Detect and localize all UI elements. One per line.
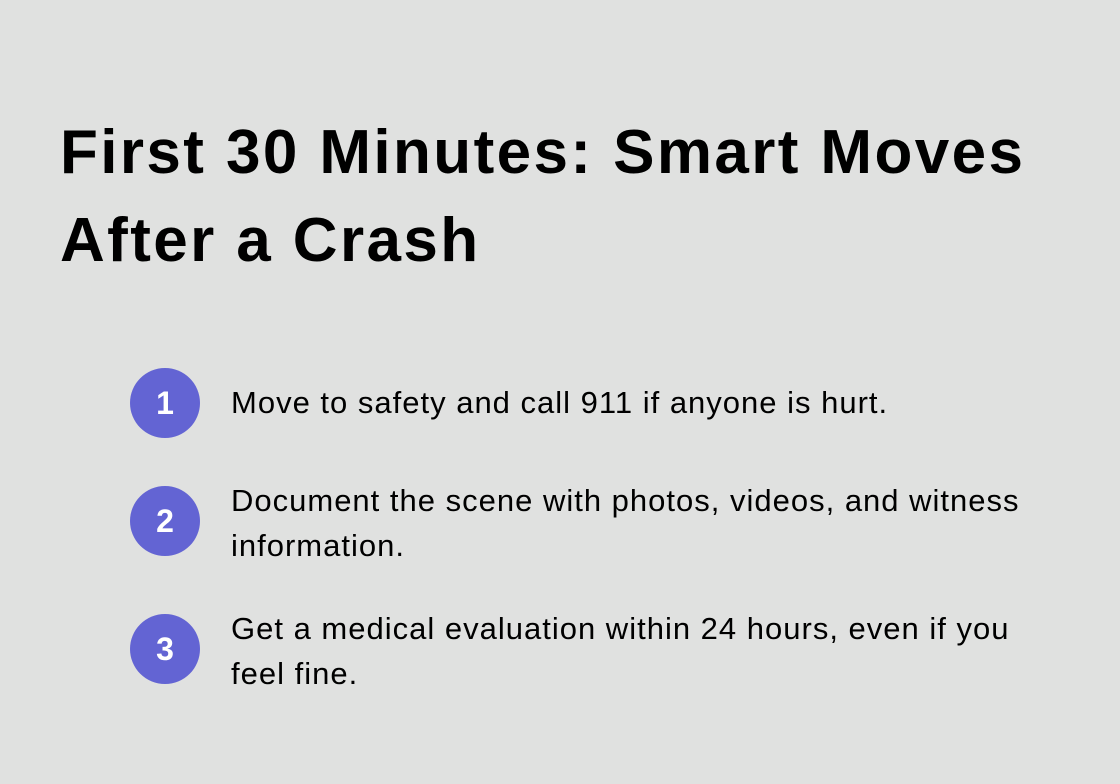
circle 1: 1 xyxy=(156,385,174,421)
title: First 30 Minutes: Smart Moves xyxy=(60,118,1025,187)
title xyxy=(60,118,1025,275)
text 3: Get a medical evaluation within 24 hours, even if you feel fine. xyxy=(231,611,1009,691)
step 1 xyxy=(130,368,888,438)
step 3 xyxy=(130,611,1009,691)
circle 1 xyxy=(130,368,200,438)
circle 2: 2 xyxy=(156,503,174,539)
text 2: Document the scene with photos, videos, and witness information. xyxy=(231,483,1020,563)
circle 3: 3 xyxy=(156,631,174,667)
circle 3 xyxy=(130,614,200,684)
circle 2 xyxy=(130,486,200,556)
title: After a Crash xyxy=(60,206,481,275)
step 2 xyxy=(130,483,1020,563)
text 1: Move to safety and call 911 if anyone is hurt. xyxy=(231,385,888,420)
